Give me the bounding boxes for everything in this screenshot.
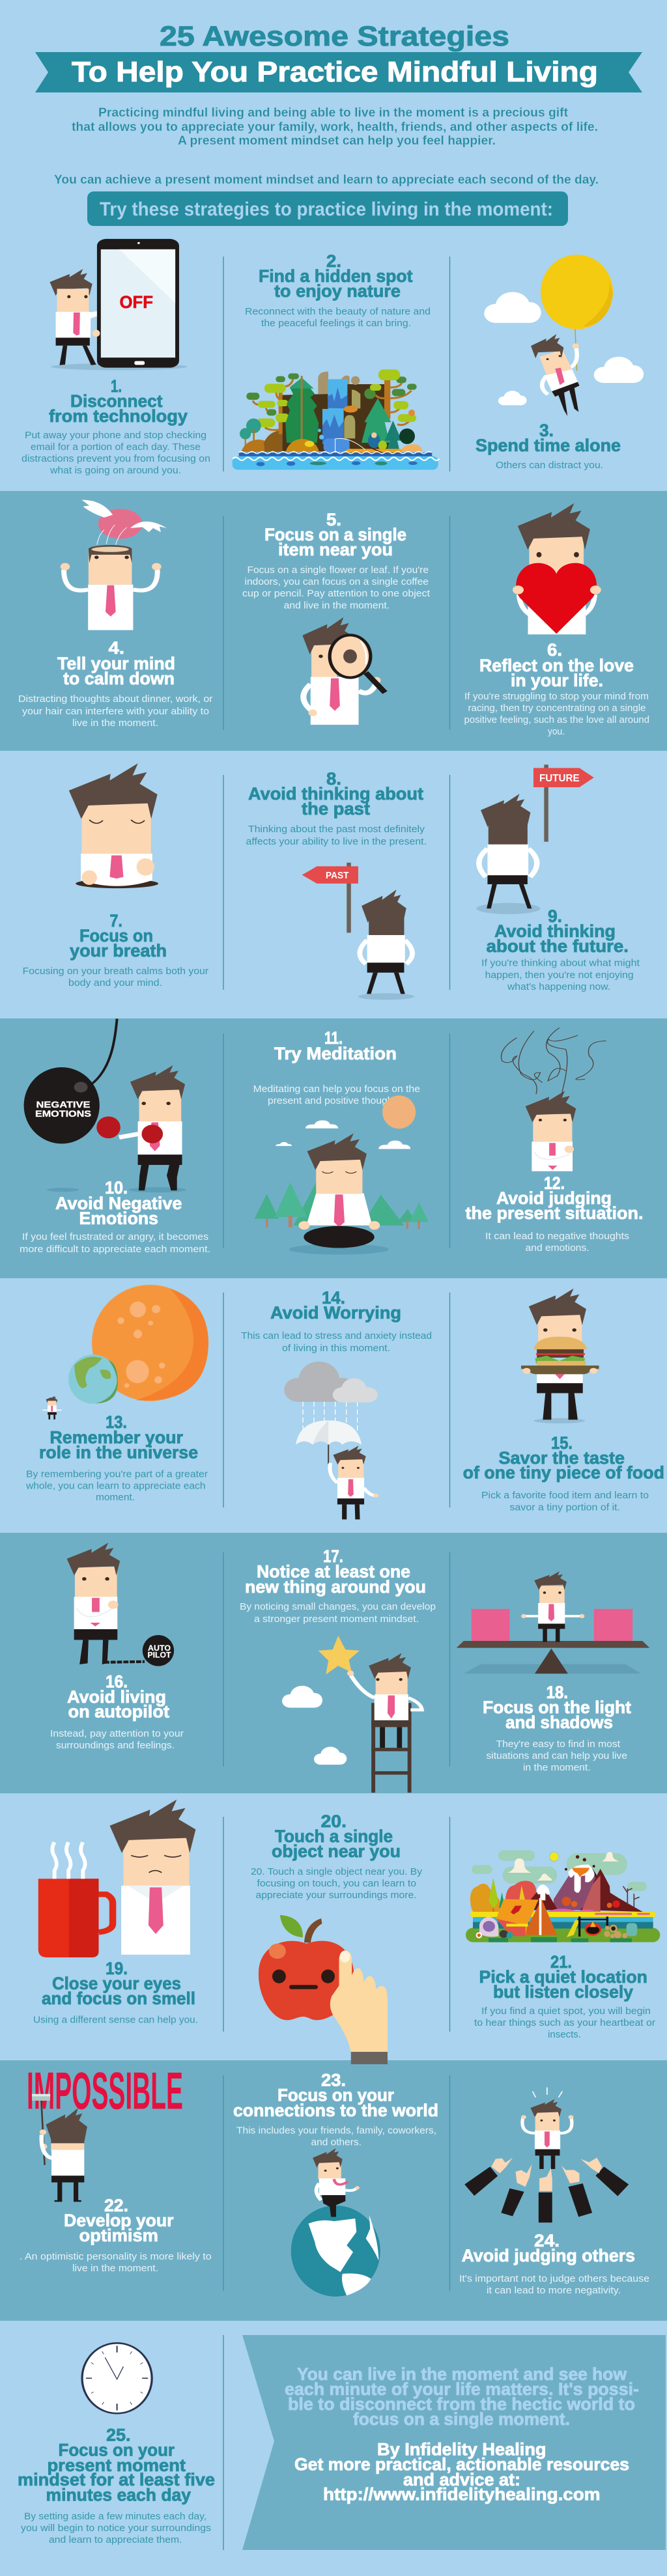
heading 7 xyxy=(70,911,167,960)
closing text: ble to disconnect from the hectic world to xyxy=(288,2394,635,2414)
panel: strategy 8 xyxy=(246,769,427,1000)
icon: man breathing xyxy=(69,763,158,888)
heading 17: 17. xyxy=(323,1547,343,1566)
intro text xyxy=(54,105,599,187)
panel: strategy 4 xyxy=(18,500,212,729)
icon: man punching wrecking ball: EMOTIONS xyxy=(35,1109,91,1119)
band: row 8 background xyxy=(0,2060,667,2321)
heading 5: 5. xyxy=(326,510,341,529)
body 1: Put away your phone and stop checking xyxy=(25,430,206,441)
heading 10: 10. xyxy=(105,1178,128,1197)
body 18: in the moment. xyxy=(523,1762,591,1773)
icon: man chained to autopilot ball xyxy=(67,1543,174,1666)
intro text: You can achieve a present moment mindset and learn to appreciate each second of the day. xyxy=(54,173,599,187)
body 13: moment. xyxy=(96,1492,135,1503)
body 9: happen, then you're not enjoying xyxy=(485,970,634,981)
panel: strategy 14 xyxy=(241,1288,432,1519)
credit text: and advice at: xyxy=(403,2470,520,2489)
heading 19: and focus on smell xyxy=(42,1989,195,2008)
body 9 xyxy=(481,957,640,992)
title ribbon: To Help You Practice Mindful Living xyxy=(72,56,598,88)
body 1 xyxy=(21,430,210,476)
heading 25: 25. xyxy=(106,2425,130,2444)
body 1: email for a portion of each day. These xyxy=(31,441,201,453)
heading 3 xyxy=(475,421,621,455)
icon: clock xyxy=(82,2343,152,2413)
panel: strategy 6 xyxy=(464,503,649,737)
heading 14: 14. xyxy=(322,1288,345,1308)
heading 12 xyxy=(465,1173,644,1223)
heading 8: the past xyxy=(302,799,370,819)
heading 18: and shadows xyxy=(505,1713,613,1732)
body 18: They're easy to find in most xyxy=(496,1739,621,1750)
icon: man on globe xyxy=(291,2148,380,2297)
body 13: whole, you can learn to appreciate each xyxy=(25,1481,205,1491)
heading 4: 4. xyxy=(108,638,124,658)
body 22: . An optimistic personality is more likely to xyxy=(20,2251,212,2262)
body 12: and emotions. xyxy=(526,1242,589,1253)
heading 4 xyxy=(57,638,175,688)
body 20: 20. Touch a single object near you. By xyxy=(251,1866,423,1877)
heading 17: Notice at least one xyxy=(257,1562,410,1582)
body 18: situations and can help you live xyxy=(486,1750,627,1761)
closing text: You can live in the moment and see how xyxy=(297,2364,627,2384)
heading 23 xyxy=(233,2071,438,2120)
body 5: and live in the moment. xyxy=(284,600,390,611)
body 22 xyxy=(20,2251,212,2274)
panel: strategy 3 xyxy=(475,255,644,471)
heading 15: Savor the taste xyxy=(499,1448,625,1468)
body 25: and learn to appreciate them. xyxy=(49,2534,182,2545)
icon: apple and finger xyxy=(259,1915,388,2064)
panel: strategy 13 xyxy=(25,1285,208,1503)
heading 23: 23. xyxy=(321,2071,346,2090)
body 5: indoors, you can focus on a single coffee xyxy=(245,576,429,587)
icon: man facing future sign xyxy=(476,764,594,914)
heading 5: item near you xyxy=(278,540,393,559)
body 9: what's happening now. xyxy=(507,981,610,992)
body 21: to hear things such as your heartbeat or xyxy=(474,2017,655,2028)
heading 5 xyxy=(264,510,406,559)
heading 25: mindset for at least five xyxy=(18,2470,215,2489)
credit text: http://www.infidelityhealing.com xyxy=(323,2485,601,2504)
panel: strategy 18 xyxy=(457,1571,649,1773)
heading 18 xyxy=(483,1683,631,1732)
heading 9: about the future. xyxy=(486,936,629,956)
panel: strategy 22: IMPOSSIBLE xyxy=(27,2062,183,2120)
heading 13: role in the universe xyxy=(39,1443,198,1463)
heading 15: 15. xyxy=(551,1433,573,1453)
heading 2: 2. xyxy=(326,251,341,271)
panel: strategy 7 xyxy=(23,763,208,988)
heading 22: Develop your xyxy=(64,2211,173,2230)
body 4: your hair can interfere with your ability to xyxy=(22,706,209,717)
body 4: Distracting thoughts about dinner, work, or xyxy=(18,693,212,705)
heading 5: Focus on a single xyxy=(264,525,406,544)
body 23: and others. xyxy=(311,2137,362,2148)
heading 21 xyxy=(479,1952,647,2002)
heading 15: of one tiny piece of food xyxy=(463,1463,664,1483)
body 2: Reconnect with the beauty of nature and xyxy=(245,306,431,317)
panel: strategy 2 xyxy=(233,251,440,469)
heading 6 xyxy=(479,640,634,690)
body 8: affects your ability to live in the present. xyxy=(246,836,427,847)
body 1: what is going on around you. xyxy=(50,465,181,476)
icon: camping volcano scene xyxy=(466,1851,660,1942)
panel: strategy 17 xyxy=(240,1547,436,1793)
body 25 xyxy=(21,2511,211,2545)
icon: man with phone xyxy=(50,239,187,371)
body 6: racing, then try concentrating on a single xyxy=(468,703,646,714)
heading 22 xyxy=(64,2196,173,2245)
heading 17 xyxy=(245,1547,426,1597)
heading 13: 13. xyxy=(106,1412,127,1432)
body 2 xyxy=(245,306,431,329)
try these strategies banner xyxy=(87,191,568,226)
heading 19 xyxy=(42,1959,195,2008)
band: row 4 background xyxy=(0,1018,667,1278)
heading 6: in your life. xyxy=(511,671,603,690)
heading 10: Emotions xyxy=(79,1209,158,1228)
panel: strategy 21 xyxy=(466,1851,660,2040)
panel: strategy 19 xyxy=(33,1800,198,2025)
heading 13: Remember your xyxy=(50,1427,183,1447)
body 5: cup or pencil. Pay attention to one object xyxy=(242,588,431,599)
body 14: This can lead to stress and anxiety instead xyxy=(241,1330,432,1341)
body 17: a stronger present moment mindset. xyxy=(254,1614,419,1625)
heading 12: 12. xyxy=(544,1173,565,1193)
body 15: Pick a favorite food item and learn to xyxy=(481,1490,649,1501)
panel: strategy 15 xyxy=(463,1289,664,1513)
title: 25 Awesome Strategies xyxy=(160,21,509,52)
heading 20: object near you xyxy=(272,1841,401,1861)
body 22: live in the moment. xyxy=(72,2263,158,2274)
heading 6: 6. xyxy=(547,640,562,660)
heading 12: the present situation. xyxy=(465,1203,644,1223)
intro text: Practicing mindful living and being able to live in the moment is a precious gift xyxy=(98,105,568,120)
body 14: of living in this moment. xyxy=(282,1343,390,1354)
panel: strategy 20 xyxy=(251,1812,423,2064)
panel: strategy 25 xyxy=(18,2343,215,2545)
icon: man on ladder reaching star xyxy=(282,1636,422,1793)
body 24 xyxy=(459,2273,649,2296)
heading 3: Spend time alone xyxy=(475,436,621,455)
heading 1: 1. xyxy=(111,376,122,396)
heading 2: Find a hidden spot xyxy=(259,266,413,286)
icon: man facing past sign: PAST xyxy=(326,870,349,881)
panel: strategy 12 xyxy=(465,1028,644,1253)
heading 7: Focus on xyxy=(79,926,153,945)
panel: strategy 16 xyxy=(50,1543,184,1751)
heading 21: but listen closely xyxy=(493,1982,633,2002)
body 25: you will begin to notice your surroundings xyxy=(21,2523,211,2534)
heading 24: 24. xyxy=(534,2231,560,2250)
icon: man under umbrella and rain cloud xyxy=(284,1362,378,1519)
icon: man painting IMPOSSIBLE xyxy=(27,2062,183,2202)
heading 7: your breath xyxy=(70,941,167,960)
body 7: Focusing on your breath calms both your xyxy=(23,966,208,977)
title ribbon xyxy=(35,52,642,92)
panel: strategy 24 xyxy=(459,2088,649,2296)
body 8: Thinking about the past most definitely xyxy=(248,824,425,835)
body 17: By noticing small changes, you can develop xyxy=(240,1601,436,1612)
heading 25 xyxy=(18,2425,215,2504)
body 20 xyxy=(251,1866,423,1901)
heading 11: Try Meditation xyxy=(274,1044,397,1063)
icon: man with tangled thoughts xyxy=(501,1028,606,1171)
heading 11 xyxy=(274,1028,397,1063)
heading 15 xyxy=(463,1433,664,1483)
try these strategies banner: Try these strategies to practice living in the moment: xyxy=(100,199,553,220)
body 18 xyxy=(486,1739,627,1773)
heading 16 xyxy=(67,1672,169,1722)
body 6: If you're struggling to stop your mind from xyxy=(464,691,649,702)
panel: strategy 1 xyxy=(21,239,210,476)
body 21: If you find a quiet spot, you will begin xyxy=(481,2006,651,2017)
heading 8: 8. xyxy=(326,769,341,789)
heading 25: minutes each day xyxy=(46,2485,191,2504)
icon: man with phone: OFF xyxy=(120,292,153,312)
heading 13 xyxy=(39,1412,198,1463)
icon: man on balance seesaw xyxy=(457,1571,649,1673)
body 3: Others can distract you. xyxy=(496,460,603,471)
body 5 xyxy=(242,565,431,611)
body 7 xyxy=(23,966,208,988)
band: row 2 background xyxy=(0,491,667,751)
body 8 xyxy=(246,824,427,847)
body 4: live in the moment. xyxy=(72,718,158,729)
heading 12: Avoid judging xyxy=(496,1188,612,1208)
heading 25: Focus on your xyxy=(59,2441,175,2460)
body 24: it can lead to more negativity. xyxy=(487,2285,621,2296)
closing text: focus on a single moment. xyxy=(353,2409,570,2429)
body 11: Meditating can help you focus on the xyxy=(253,1084,420,1095)
body 6: you. xyxy=(548,726,565,737)
body 1: distractions prevent you from focusing on xyxy=(21,453,210,464)
body 13 xyxy=(25,1469,208,1503)
icon: hands pointing at man xyxy=(464,2088,629,2222)
heading 10: Avoid Negative xyxy=(55,1194,182,1213)
body 21: insects. xyxy=(548,2029,581,2040)
heading 8: Avoid thinking about xyxy=(248,784,423,804)
panel: strategy 23 xyxy=(233,2071,438,2297)
icon: nature island xyxy=(233,369,440,469)
heading 19: Close your eyes xyxy=(52,1974,181,1993)
heading 22: 22. xyxy=(104,2196,128,2215)
icon: man facing past sign xyxy=(302,863,414,1000)
body 5: Focus on a single flower or leaf. If you're xyxy=(248,565,429,576)
body 19: Using a different sense can help you. xyxy=(33,2015,198,2025)
panel: strategy 5 xyxy=(242,510,431,725)
panel: strategy 10 xyxy=(20,1018,210,1255)
icon: man facing future sign: FUTURE xyxy=(539,773,580,784)
body 21 xyxy=(474,2006,655,2040)
body 13: By remembering you're part of a greater xyxy=(26,1469,208,1480)
heading 1 xyxy=(49,376,188,426)
body 14 xyxy=(241,1330,432,1354)
icon: man chained to autopilot ball: AUTO xyxy=(148,1644,171,1653)
heading 20: Touch a single xyxy=(275,1827,393,1846)
heading 9: Avoid thinking xyxy=(494,921,616,941)
heading 23: Focus on your xyxy=(277,2086,394,2105)
heading 8 xyxy=(248,769,423,819)
heading 2: to enjoy nature xyxy=(274,281,401,301)
panel: strategy 11 xyxy=(253,1028,429,1255)
body 12 xyxy=(485,1231,629,1253)
heading 20: 20. xyxy=(320,1812,347,1831)
heading 21: 21. xyxy=(550,1952,572,1972)
icon: man chained to autopilot ball: PILOT xyxy=(147,1650,171,1659)
body 6: positive feeling, such as the love all around xyxy=(464,714,649,725)
heading 24 xyxy=(462,2231,635,2265)
heading 4: Tell your mind xyxy=(57,654,175,673)
icon: man holding burger xyxy=(521,1289,599,1423)
body 10: more difficult to appreciate each moment. xyxy=(20,1244,210,1255)
heading 23: connections to the world xyxy=(233,2101,438,2120)
body 16: surroundings and feelings. xyxy=(56,1740,175,1751)
heading 14: Avoid Worrying xyxy=(270,1303,401,1323)
closing text xyxy=(285,2364,639,2429)
body 6 xyxy=(464,691,649,737)
icon: man punching wrecking ball xyxy=(24,1018,186,1192)
heading 9 xyxy=(486,906,629,956)
heading 19: 19. xyxy=(106,1959,128,1978)
heading 11: 11. xyxy=(324,1028,343,1048)
panel: strategy 22 xyxy=(20,2062,212,2274)
body 2: the peaceful feelings it can bring. xyxy=(261,318,411,329)
intro text: A present moment mindset can help you feel happier. xyxy=(178,133,496,148)
heading 16: 16. xyxy=(106,1672,128,1692)
heading 22: optimism xyxy=(79,2226,158,2245)
body 10: If you feel frustrated or angry, it becomes xyxy=(22,1231,208,1242)
heading 1: from technology xyxy=(49,406,188,426)
body 16: Instead, pay attention to your xyxy=(50,1728,184,1739)
body 10 xyxy=(20,1231,210,1255)
icon: man with flying brain xyxy=(61,500,167,630)
heading 2 xyxy=(259,251,413,301)
heading 17: new thing around you xyxy=(245,1577,426,1597)
heading 3: 3. xyxy=(539,421,554,440)
heading 16: Avoid living xyxy=(67,1687,166,1707)
body 7: body and your mind. xyxy=(68,977,162,988)
heading 21: Pick a quiet location xyxy=(479,1967,647,1987)
heading 14 xyxy=(270,1288,401,1323)
body 16 xyxy=(50,1728,184,1751)
body 17 xyxy=(240,1601,436,1625)
heading 1: Disconnect xyxy=(70,391,163,411)
heading 4: to calm down xyxy=(63,669,175,688)
body 15 xyxy=(481,1490,649,1513)
heading 20 xyxy=(272,1812,401,1861)
closing text: each minute of your life matters. It's possi- xyxy=(285,2379,639,2399)
body 20: appreciate your surroundings more. xyxy=(255,1890,417,1901)
heading 18: 18. xyxy=(546,1683,568,1702)
body 20: focusing on touch, you can learn to xyxy=(257,1878,416,1889)
icon: man smelling red mug xyxy=(38,1800,195,1957)
credit text: Get more practical, actionable resources xyxy=(294,2455,629,2474)
body 25: By setting aside a few minutes each day, xyxy=(24,2511,206,2522)
heading 24: Avoid judging others xyxy=(462,2246,635,2265)
heading 6: Reflect on the love xyxy=(479,656,634,675)
heading 16: on autopilot xyxy=(68,1702,169,1722)
body 23: This includes your friends, family, coworkers, xyxy=(236,2125,436,2136)
heading 10 xyxy=(55,1178,182,1228)
body 23 xyxy=(236,2125,436,2148)
intro text: that allows you to appreciate your family, work, health, friends, and other aspects of life. xyxy=(72,120,598,134)
credit text xyxy=(294,2440,629,2504)
icon: planets and tiny man xyxy=(42,1285,208,1420)
body 9: If you're thinking about what might xyxy=(481,957,640,969)
body 12: It can lead to negative thoughts xyxy=(485,1231,629,1242)
body 24: It's important not to judge others because xyxy=(459,2273,649,2284)
heading 9: 9. xyxy=(548,906,562,926)
icon: man holding heart xyxy=(513,503,601,634)
icon: man punching wrecking ball: NEGATIVE xyxy=(36,1100,90,1110)
body 11 xyxy=(253,1084,420,1106)
band: row 6 background xyxy=(0,1533,667,1793)
icon: man floating with balloon xyxy=(484,255,644,416)
body 15: savor a tiny portion of it. xyxy=(509,1502,620,1513)
panel: closing message xyxy=(242,2335,666,2550)
panel: strategy 9 xyxy=(476,764,640,992)
heading 7: 7. xyxy=(109,911,122,931)
heading 25: present moment xyxy=(47,2456,186,2475)
heading 18: Focus on the light xyxy=(483,1698,631,1717)
icon: man with magnifying glass xyxy=(302,617,385,725)
credit text: By Infidelity Healing xyxy=(377,2440,546,2459)
body 4 xyxy=(18,693,212,729)
body 11: present and positive thoughts. xyxy=(268,1095,404,1106)
icon: man meditating xyxy=(255,1095,429,1255)
